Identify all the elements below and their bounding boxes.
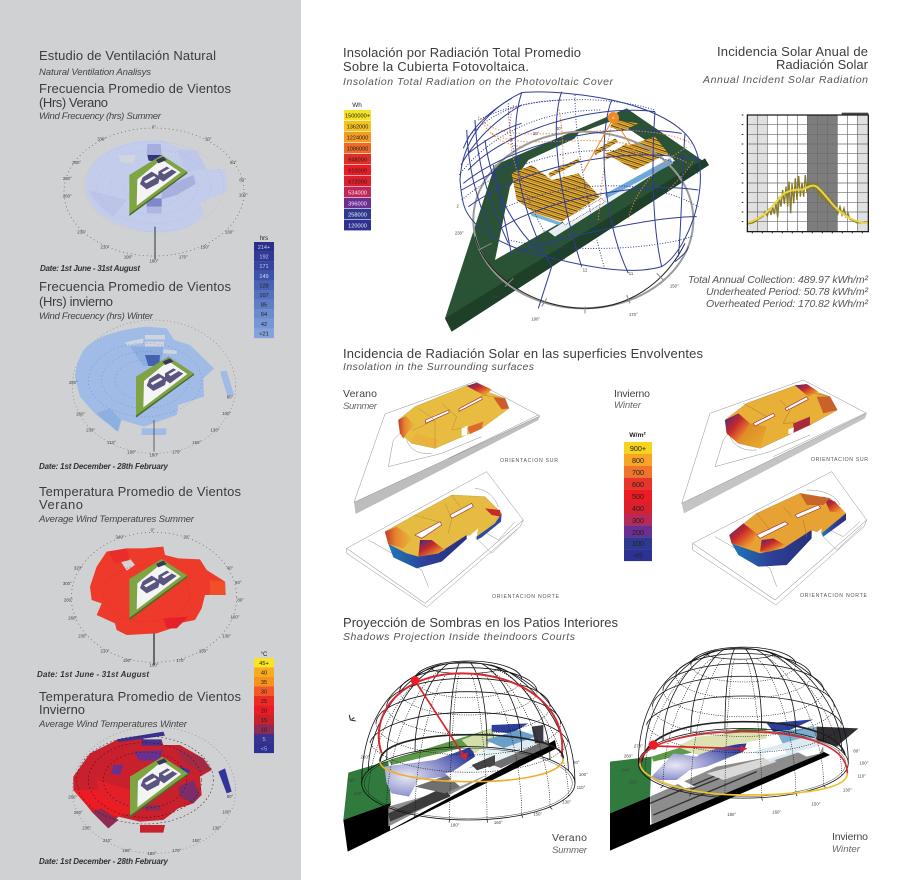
annual totals: Overheated Period: 170.82 kWh/m²	[706, 298, 868, 310]
chart: wind rose summer frequency: 170°	[179, 255, 188, 260]
label: winter: Invierno	[614, 388, 650, 400]
label: winter shadow	[832, 831, 868, 855]
chart: wind rose winter temperature: 130°	[212, 825, 221, 830]
legend: hours: 171	[259, 264, 269, 270]
chart: wind rose summer temperature: 130°	[222, 633, 231, 638]
chart: wind rose winter frequency: 80°	[227, 395, 234, 400]
heading: summer wind temperature	[38, 484, 242, 525]
chart: wind rose summer frequency: 100°	[239, 193, 248, 198]
diagram: summer shadow dome: 230°	[354, 791, 363, 796]
label: summer shadow	[552, 832, 588, 856]
diagram: solar globe over the site: 190°	[531, 317, 540, 322]
heading: shadow projection: Proyección de Sombras en los Patios Interiores	[343, 615, 618, 630]
heading: summer wind frequency	[39, 81, 232, 122]
chart: wind rose summer frequency: 260°	[63, 193, 72, 198]
chart: wind rose summer temperature: 20°	[183, 534, 190, 539]
legend: temperature: 45+	[259, 661, 269, 667]
diagram: winter shadow dome: 130°	[843, 787, 852, 792]
heading: winter wind frequency: Frecuencia Promedio de Vientos	[39, 279, 232, 294]
diagram: winter shadow dome: 260°	[624, 754, 633, 759]
diagram: winter shadow dome: 270°	[634, 743, 643, 748]
chart: wind rose winter frequency: 100°	[222, 411, 231, 416]
legend: temperature: 35	[261, 680, 267, 686]
heading: natural ventilation	[39, 48, 216, 78]
model: winter north orientation	[693, 472, 867, 605]
legend: hours: 149	[259, 274, 269, 280]
legend: hours: <21	[259, 331, 269, 337]
heading: winter wind temperature: Average Wind Temperatures Winter	[38, 719, 188, 730]
legend: watt hours: 1362000	[347, 125, 368, 131]
chart: wind rose summer frequency: 330°	[97, 137, 106, 142]
legend: watt hours: 534000	[348, 191, 367, 197]
label: winter: Winter	[614, 400, 642, 411]
chart: wind rose winter frequency	[69, 320, 236, 458]
diagram: summer shadow dome: 130°	[562, 799, 571, 804]
chart: wind rose summer frequency: 180°	[150, 259, 159, 264]
chart: wind rose summer temperature: 100°	[231, 614, 240, 619]
chart: wind rose winter frequency: 230°	[86, 428, 95, 433]
heading: summer wind frequency: Wind Frecuency (hrs) Summer	[39, 111, 162, 122]
legend: temperature: 15	[261, 718, 267, 724]
caption: winter date: Date: 1st December - 28th February	[39, 462, 169, 471]
annual totals: Underheated Period: 50.78 kWh/m²	[706, 286, 868, 298]
legend: temperature: <5	[261, 746, 267, 752]
diagram: solar globe over the site: 40°	[556, 126, 563, 131]
diagram: winter shadow dome: 160°	[772, 809, 781, 814]
model: winter south orientation	[682, 380, 867, 513]
legend: irradiance	[624, 432, 652, 561]
heading: annual incidence: Radiación Solar	[776, 57, 869, 72]
heading: summer wind frequency: (Hrs) Verano	[39, 95, 108, 110]
legend: temperature: 20	[261, 708, 267, 714]
heading: surrounding surfaces: Insolation in the Surrounding surfaces	[343, 361, 535, 373]
legend: hours: 85	[261, 303, 267, 309]
label: orientation south summer: ORIENTACION SUR	[500, 458, 558, 464]
label: summer shadow: Verano	[552, 832, 587, 844]
diagram: winter shadow dome: 100°	[860, 761, 869, 766]
legend: watt hours: 396000	[348, 202, 367, 208]
chart: wind rose winter frequency: 130°	[211, 428, 220, 433]
left panel background	[0, 0, 301, 880]
heading: annual incidence: Annual Incident Solar Radiation	[702, 74, 868, 86]
diagram: winter shadow dome: 110°	[857, 773, 866, 778]
legend: irradiance: 600	[632, 480, 644, 489]
chart: wind rose winter frequency: 190°	[127, 449, 136, 454]
diagram: winter shadow dome: 80°	[853, 749, 860, 754]
diagram: summer shadow dome: 180°	[451, 823, 460, 828]
heading: winter wind temperature: Temperatura Promedio de Vientos	[39, 689, 242, 704]
heading: shadow projection	[343, 615, 618, 643]
legend: irradiance: W/m²	[629, 432, 647, 439]
legend: irradiance: 300	[632, 516, 644, 525]
panel: photovoltaic cover insolation	[343, 45, 709, 332]
label: summer: Verano	[343, 388, 377, 400]
label: summer shadow: Summer	[552, 845, 588, 856]
legend: irradiance: 200	[632, 528, 644, 537]
legend: watt hours	[344, 102, 371, 230]
panel: surrounding surfaces insolation	[343, 346, 868, 607]
chart: wind rose winter frequency: 210°	[107, 440, 116, 445]
chart: wind rose summer frequency: 300°	[72, 160, 81, 165]
legend: watt hours: 1500000+	[345, 114, 370, 120]
chart: wind rose summer temperature: 210°	[101, 649, 110, 654]
label: summer: Summer	[343, 401, 378, 412]
diagram: solar globe over the site: 150°	[670, 284, 679, 289]
legend: hours: 214+	[258, 245, 270, 251]
label: winter shadow: Invierno	[832, 831, 868, 843]
chart: wind rose summer frequency: 0°	[152, 125, 156, 130]
chart: wind rose summer frequency: 130°	[225, 229, 234, 234]
chart: wind rose winter temperature: 170°	[172, 848, 181, 853]
chart: wind rose summer temperature: 280°	[64, 598, 73, 603]
legend: hours: 192	[259, 255, 269, 261]
legend: hours	[254, 236, 274, 338]
chart: wind rose winter frequency: 170°	[172, 449, 181, 454]
heading: annual incidence	[702, 44, 869, 86]
legend: temperature: °C	[261, 652, 268, 658]
legend: temperature: 40	[261, 670, 267, 676]
heading: natural ventilation: Estudio de Ventilación Natural	[39, 48, 216, 63]
chart: wind rose winter frequency: 280°	[69, 380, 78, 385]
diagram: summer shadow dome	[343, 661, 588, 852]
legend: temperature: 5	[262, 737, 266, 743]
legend: watt hours: Wh	[352, 102, 362, 109]
chart: wind rose winter frequency: 180°	[150, 453, 159, 458]
diagram: summer shadow dome: 160°	[494, 820, 503, 825]
diagram: winter shadow dome: 230°	[629, 779, 638, 784]
legend: watt hours: 948000	[348, 158, 367, 164]
legend: temperature	[254, 652, 274, 753]
legend: irradiance: 100	[632, 539, 644, 548]
legend: temperature: 10	[261, 728, 267, 734]
legend: temperature: 30	[261, 690, 267, 696]
legend: irradiance: <0	[634, 551, 642, 560]
chart: wind rose summer frequency: 210°	[101, 245, 110, 250]
heading: total radiation	[343, 45, 614, 88]
diagram: summer shadow dome: 80°	[573, 760, 580, 765]
diagram: summer shadow dome: 100°	[579, 772, 588, 777]
chart: wind rose summer frequency: 80°	[239, 178, 246, 183]
legend: watt hours: 258000	[348, 213, 367, 219]
chart: wind rose winter temperature: 150°	[192, 838, 201, 843]
legend: hours: hrs	[260, 236, 268, 242]
legend: irradiance: 400	[632, 504, 644, 513]
heading: total radiation: Insolación por Radiación Total Promedio	[343, 45, 581, 60]
chart: wind rose winter temperature	[68, 727, 236, 856]
chart: wind rose summer frequency	[63, 125, 248, 264]
annual totals	[688, 274, 868, 310]
chart: wind rose winter frequency: 150°	[192, 440, 201, 445]
diagram: summer shadow dome: 240°	[347, 778, 356, 783]
diagram: solar globe over the site: 0	[612, 115, 615, 120]
chart: wind rose winter frequency: 260°	[76, 411, 85, 416]
annual totals: Total Annual Collection: 489.97 kWh/m²	[688, 274, 868, 286]
diagram: summer shadow dome: 260°	[361, 755, 370, 760]
heading: summer wind temperature: Verano	[39, 497, 83, 512]
heading: summer wind temperature: Average Wind Temperatures Summer	[38, 514, 195, 525]
heading: annual incidence: Incidencia Solar Anual de	[717, 44, 868, 59]
diagram: summer shadow dome: 110°	[577, 785, 586, 790]
diagram: solar globe over the site: 200°	[491, 295, 500, 300]
heading: natural ventilation: Natural Ventilation Analisys	[39, 67, 151, 78]
chart: wind rose summer frequency: 60°	[230, 160, 237, 165]
heading: shadow projection: Shadows Projection Inside theindoors Courts	[343, 631, 576, 643]
heading: winter wind temperature: Invierno	[39, 702, 85, 717]
diagram: summer shadow dome: 150°	[533, 812, 542, 817]
heading: winter wind frequency	[39, 279, 232, 322]
legend: watt hours: 120000	[348, 224, 367, 230]
label: orientation north summer: ORIENTACION NORTE	[492, 594, 560, 600]
chart: wind rose summer temperature: 320°	[74, 565, 83, 570]
caption: summer temperature date: Date: 1st June - 31st August	[37, 670, 149, 679]
legend: irradiance: 500	[632, 492, 644, 501]
label: orientation north winter: ORIENTACION NORTE	[800, 593, 868, 599]
diagram: solar globe over the site: 11	[629, 271, 634, 276]
legend: watt hours: 1086000	[347, 147, 368, 153]
diagram: solar globe over the site	[445, 92, 709, 332]
legend: irradiance: 800	[632, 456, 644, 465]
heading: winter wind temperature	[38, 689, 242, 730]
label: orientation south winter: ORIENTACION SUR	[811, 457, 868, 463]
diagram: solar globe over the site: 230°	[455, 231, 464, 236]
chart: wind rose winter temperature: 230°	[82, 825, 91, 830]
chart: wind rose winter temperature: 260°	[74, 810, 83, 815]
chart: wind rose summer temperature: 60°	[235, 580, 242, 585]
legend: irradiance: 700	[632, 468, 644, 477]
chart: wind rose summer temperature: 340°	[116, 534, 125, 539]
chart: wind rose winter temperature: 80°	[227, 794, 234, 799]
heading: summer wind frequency: Frecuencia Promedio de Vientos	[39, 81, 232, 96]
diagram: solar globe over the site: 210°	[467, 263, 476, 268]
chart: wind rose summer temperature: 190°	[123, 658, 132, 663]
legend: temperature: 25	[261, 699, 267, 705]
panel: natural ventilation study	[37, 48, 274, 866]
chart: wind rose summer temperature: 0°	[151, 528, 155, 533]
label: summer	[343, 388, 378, 412]
chart: wind rose summer temperature: 150°	[199, 649, 208, 654]
chart: wind rose summer temperature: 40°	[227, 565, 234, 570]
legend: hours: 64	[261, 312, 267, 318]
chart: annual solar radiation	[742, 113, 868, 234]
legend: hours: 42	[261, 322, 267, 328]
diagram: winter shadow dome: 150°	[812, 802, 821, 807]
legend: watt hours: 1224000	[347, 136, 368, 142]
chart: wind rose summer frequency: 280°	[63, 176, 72, 181]
chart: wind rose winter temperature: 100°	[222, 809, 231, 814]
panel: interior court shadow projection	[343, 615, 869, 856]
heading: total radiation: Sobre la Cubierta Fotovoltaica.	[343, 59, 529, 74]
label: winter shadow: Winter	[832, 844, 861, 855]
chart: wind rose summer temperature: 260°	[68, 615, 77, 620]
diagram: winter shadow dome: 180°	[727, 812, 736, 817]
diagram: winter shadow dome	[610, 647, 869, 851]
chart: wind rose winter temperature: 210°	[103, 838, 112, 843]
chart: wind rose winter temperature: 190°	[122, 848, 131, 853]
model: summer north orientation	[347, 472, 523, 607]
heading: surrounding surfaces	[343, 346, 704, 373]
chart: wind rose summer temperature: 180°	[150, 663, 159, 668]
chart: wind rose summer temperature: 170°	[176, 658, 185, 663]
chart: wind rose winter temperature: 180°	[148, 851, 157, 856]
heading: surrounding surfaces: Incidencia de Radiación Solar en las superficies Envolventes	[343, 346, 704, 361]
chart: wind rose winter temperature: 280°	[68, 794, 77, 799]
legend: watt hours: 672000	[348, 180, 367, 186]
legend: hours: 107	[259, 293, 269, 299]
panel: annual incident solar radiation	[688, 44, 869, 310]
heading: summer wind temperature: Temperatura Promedio de Vientos	[39, 484, 242, 499]
chart: wind rose summer frequency: 30°	[205, 137, 212, 142]
diagram: solar globe over the site: 2	[456, 203, 459, 208]
chart: wind rose summer temperature: 300°	[63, 581, 72, 586]
diagram: solar globe over the site: 20°	[533, 131, 540, 136]
heading: winter wind frequency: (Hrs) invierno	[39, 294, 113, 309]
chart: wind rose summer temperature: 80°	[237, 598, 244, 603]
chart: wind rose summer frequency: 190°	[124, 255, 133, 260]
legend: watt hours: 810000	[348, 169, 367, 175]
legend: irradiance: 900+	[630, 444, 646, 453]
heading: total radiation: Insolation Total Radiation on the Photovoltaic Cover	[343, 76, 614, 88]
chart: wind rose summer frequency: 150°	[201, 245, 210, 250]
diagram: solar globe over the site: 12	[583, 268, 588, 273]
caption: winter temperature date: Date: 1st December - 28th February	[39, 857, 169, 866]
label: winter	[614, 388, 650, 411]
model: summer south orientation	[354, 382, 540, 514]
chart: wind rose summer temperature: 230°	[78, 633, 87, 638]
heading: winter wind frequency: Wind Frecuency (hrs) Winter	[39, 311, 154, 322]
chart: wind rose summer frequency: 230°	[77, 229, 86, 234]
diagram: winter shadow dome: 240°	[622, 767, 631, 772]
chart: wind rose summer temperature	[63, 528, 244, 668]
legend: hours: 128	[259, 283, 269, 289]
caption: summer date: Date: 1st June - 31st August	[40, 264, 140, 273]
diagram: solar globe over the site: 170°	[629, 312, 638, 317]
